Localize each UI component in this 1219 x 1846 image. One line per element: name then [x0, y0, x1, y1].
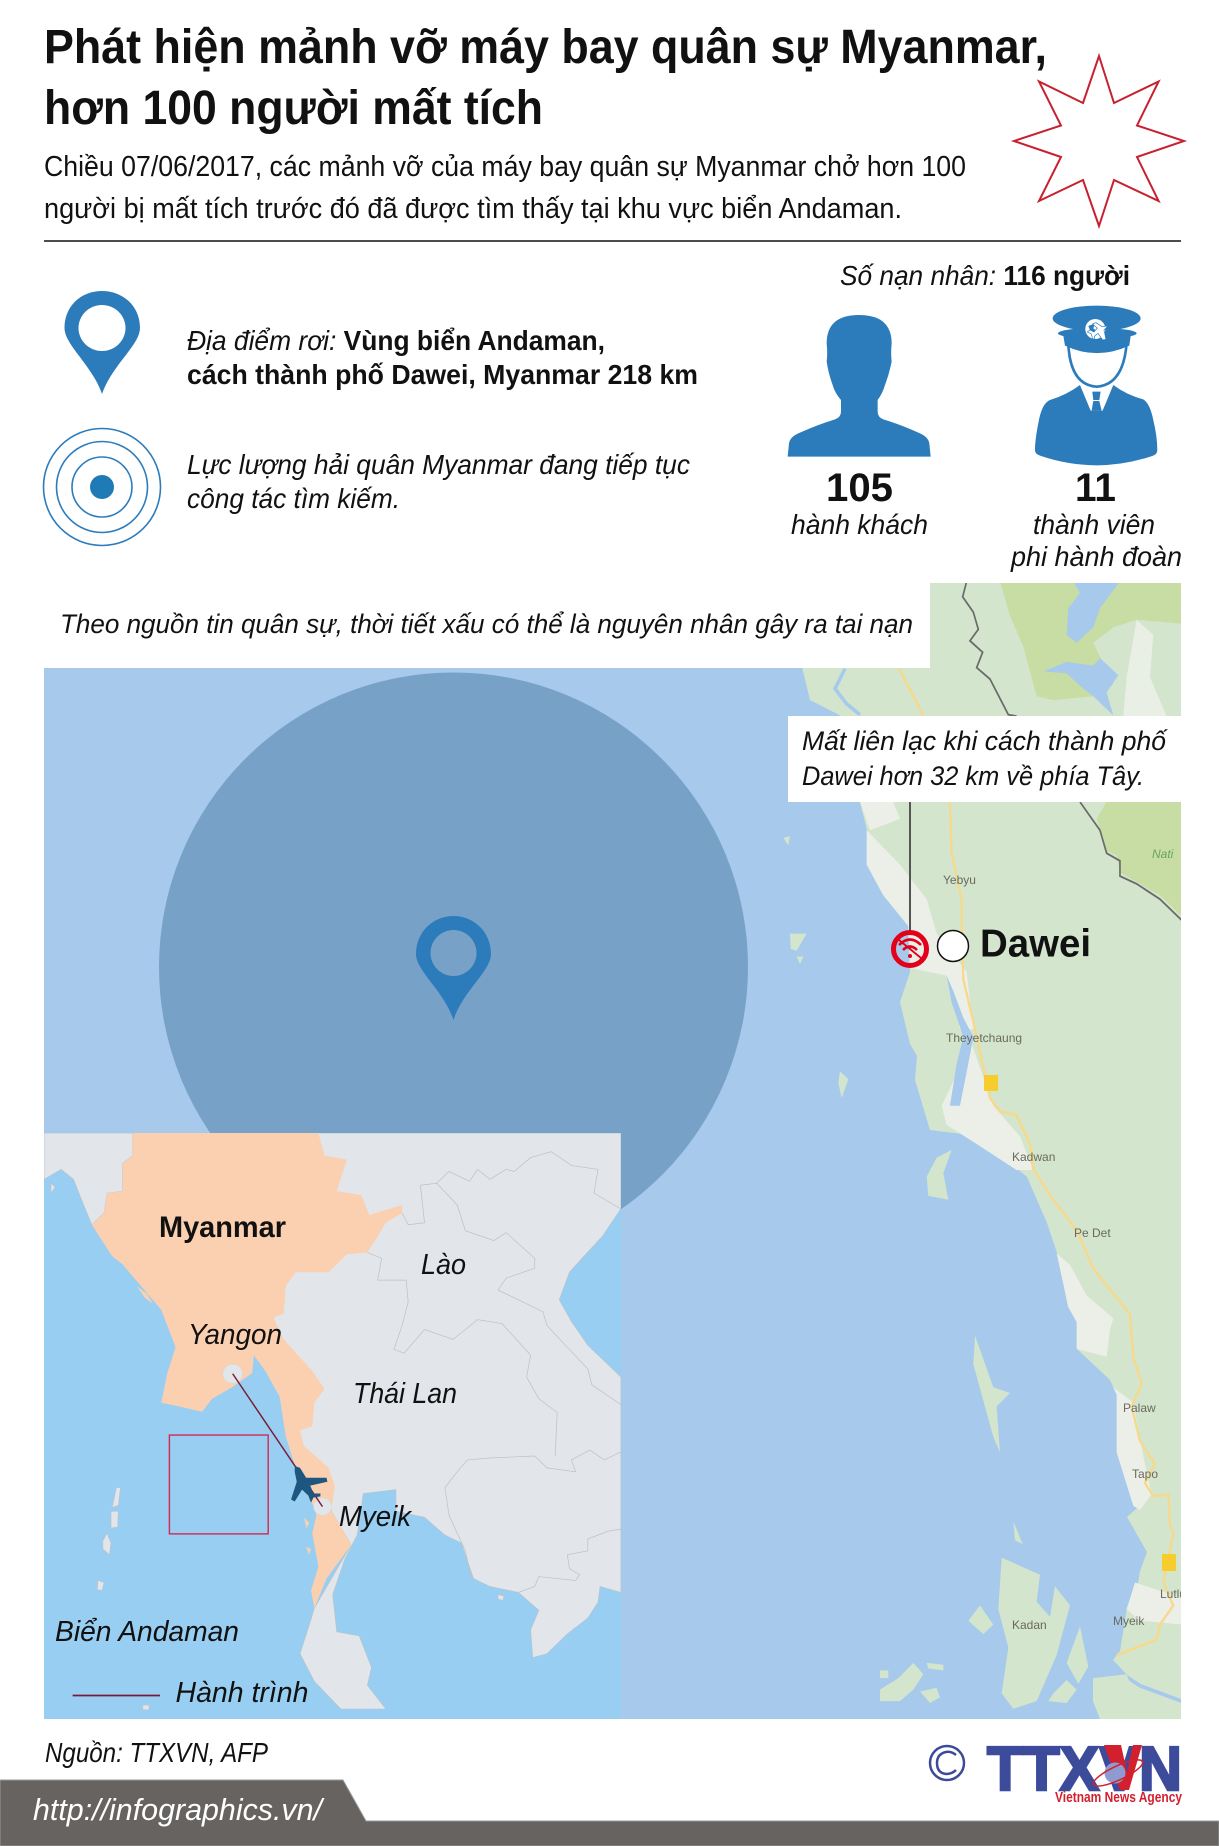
land details south	[880, 1150, 1182, 1709]
stat: passengers: 105	[826, 466, 893, 510]
logo: TTXVN: TTXVN	[987, 1735, 1182, 1804]
search text: công tác tìm kiếm.	[187, 483, 400, 514]
icon: passenger	[788, 315, 931, 457]
icon: crash pin	[416, 916, 491, 1020]
inset labels: Myeik	[339, 1501, 412, 1533]
search text: Lực lượng hải quân Myanmar đang tiếp tục	[187, 449, 690, 480]
icon: copyright	[930, 1746, 964, 1780]
stat: crew: thành viên	[1033, 509, 1155, 540]
leader line	[909, 802, 911, 932]
inset map	[44, 1133, 621, 1719]
subtitle: người bị mất tích trước đó đã được tìm thấy tại khu vực biển Andaman.	[44, 193, 902, 225]
crash location text: Địa điểm rơi: Vùng biển Andaman,	[187, 325, 605, 356]
search text	[187, 449, 690, 514]
map place names: Myeik	[1113, 1614, 1145, 1628]
icon: location pin	[64, 291, 140, 394]
map place names	[943, 847, 1186, 1632]
inset: city markers	[223, 1364, 331, 1515]
icon: search rings	[44, 428, 160, 546]
footer bar	[0, 1780, 1219, 1846]
icon: explosion star	[1014, 56, 1184, 226]
map place names: Lutlu	[1160, 1587, 1186, 1601]
icon: plane	[291, 1466, 327, 1503]
stat: passengers	[791, 466, 928, 540]
map place names: Tapo	[1132, 1467, 1158, 1481]
stat: crew: phi hành đoàn	[1010, 541, 1182, 572]
map place names: Yebyu	[943, 873, 976, 887]
road signs	[984, 1075, 1176, 1571]
inset: Myanmar	[92, 1133, 402, 1608]
inset labels: Myanmar	[159, 1211, 286, 1244]
main map	[44, 581, 1186, 1719]
inset: flight path	[233, 1374, 322, 1507]
subtitle	[44, 151, 966, 225]
victims heading: Số nạn nhân: 116 người	[840, 260, 1130, 291]
inset: search square	[169, 1435, 268, 1534]
stat: passengers: hành khách	[791, 509, 928, 540]
callout: lost contact	[788, 716, 1181, 802]
land: coast of Myanmar	[790, 583, 1181, 1719]
title	[44, 21, 1047, 135]
Dawei marker	[936, 928, 1088, 962]
map place names: Nati	[1152, 847, 1174, 861]
subtitle: Chiều 07/06/2017, các mảnh vỡ của máy bay quân sự Myanmar chở hơn 100	[44, 151, 966, 183]
icon: lost signal	[894, 932, 926, 966]
logo: TTXVN: Vietnam News Agency	[1055, 1789, 1183, 1806]
callout: lost contact: Mất liên lạc khi cách thành phố	[802, 726, 1168, 756]
inset labels	[55, 1211, 466, 1648]
icon: crew officer	[1035, 306, 1157, 465]
stat: crew: 11	[1075, 466, 1116, 510]
Dawei marker: Dawei	[980, 922, 1091, 966]
map place names: Palaw	[1123, 1401, 1156, 1415]
inset labels: Yangon	[188, 1319, 282, 1351]
source: Nguồn: TTXVN, AFP	[45, 1737, 268, 1768]
title: hơn 100 người mất tích	[44, 82, 543, 135]
inset: neighbouring land	[44, 1133, 621, 1710]
map place names: Pe Det	[1074, 1226, 1111, 1240]
crash location text: cách thành phố Dawei, Myanmar 218 km	[187, 359, 698, 390]
stat: crew	[1010, 466, 1182, 572]
search area circle	[159, 672, 748, 1262]
land details north	[783, 581, 1182, 1170]
caption: weather: Theo nguồn tin quân sự, thời tiết xấu có thể là nguyên nhân gây ra tai nạn	[60, 609, 913, 639]
caption: weather	[44, 583, 930, 668]
crash location text	[187, 325, 698, 390]
legend: route: Hành trình	[176, 1677, 308, 1709]
map place names: Kadan	[1012, 1618, 1047, 1632]
callout: lost contact: Dawei hơn 32 km về phía Tây.	[802, 761, 1144, 791]
footer bar: http://infographics.vn/	[33, 1792, 325, 1827]
map place names: Theyetchaung	[946, 1031, 1022, 1045]
inset labels: Thái Lan	[353, 1378, 457, 1410]
inset labels: Biển Andaman	[55, 1616, 239, 1648]
title: Phát hiện mảnh vỡ máy bay quân sự Myanmar,	[44, 21, 1047, 74]
inset labels: Lào	[421, 1249, 466, 1281]
map place names: Kadwan	[1012, 1150, 1055, 1164]
